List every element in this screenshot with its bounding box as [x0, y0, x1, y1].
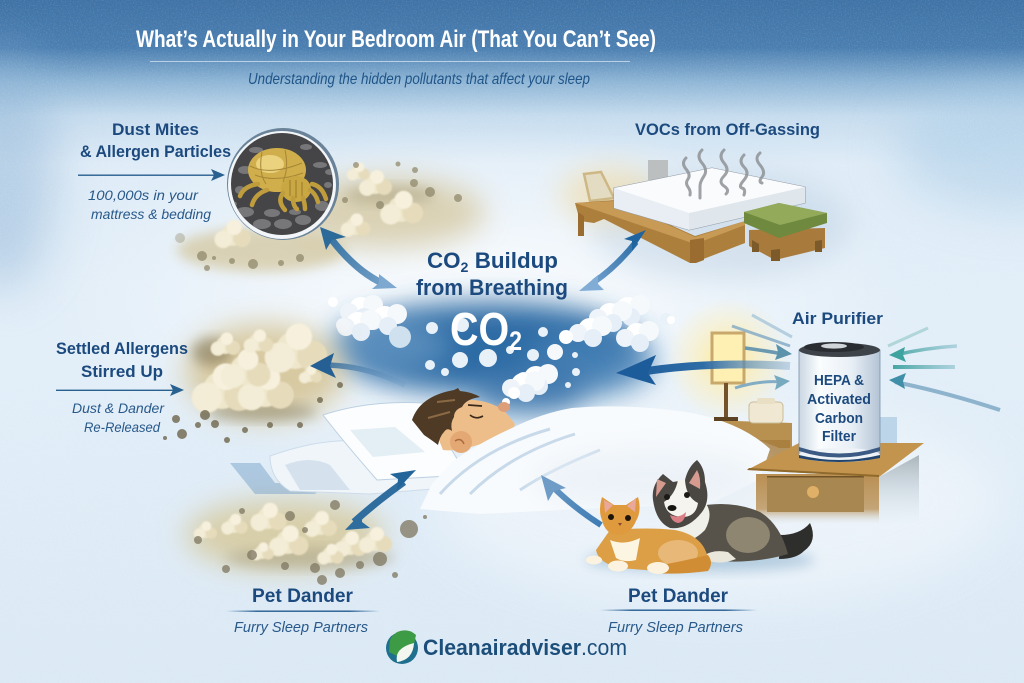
pet dander label right: Furry Sleep Partners [608, 620, 743, 636]
icon: air purifier: Activated [807, 391, 871, 408]
dust mite description: 100,000s in your [88, 187, 199, 203]
arrows: air drawn into purifier left side [732, 315, 792, 390]
blanket [420, 406, 770, 514]
logo: Cleanairadviser.com [386, 630, 627, 664]
icon: air purifier: HEPA & [814, 372, 864, 389]
dust mite heading: & Allergen Particles [80, 142, 231, 161]
hair [412, 388, 480, 445]
heading: CO2 buildup [416, 248, 568, 300]
label: big CO2: 2 [509, 326, 522, 356]
pet dander label right: Pet Dander [628, 586, 729, 607]
settled allergens heading [56, 339, 188, 381]
settled allergens heading: Stirred Up [81, 362, 163, 381]
thought bubbles from sleeper [425, 318, 580, 406]
nose [498, 402, 510, 412]
settled allergens description [72, 400, 165, 435]
arrow: pets to sleeper [541, 475, 601, 525]
heading: air purifier: Air Purifier [792, 309, 883, 328]
heading: CO2 buildup: from Breathing [416, 275, 568, 300]
clouds right [547, 295, 675, 360]
heading: CO2 buildup: CO [427, 248, 460, 273]
front pillow [323, 402, 467, 480]
settled allergens description: Re-Released [84, 419, 161, 435]
icon: front nightstand [747, 417, 924, 525]
label: big CO2: CO [450, 303, 519, 355]
arrow: CO2 to settled allergens [310, 353, 405, 385]
panel: mattress and bed [560, 160, 850, 280]
heading: VOCs: VOCs from Off-Gassing [635, 120, 820, 139]
dust cloud: bottom pet dander [185, 499, 427, 585]
settled allergens heading: Settled Allergens [56, 339, 188, 358]
icon: green ottoman [744, 203, 827, 261]
back pillow [270, 441, 470, 494]
wall frame [584, 172, 614, 201]
pet dander label left: Pet Dander [252, 586, 354, 607]
dust mite description: mattress & bedding [91, 206, 211, 222]
icon: off-gassing wavy lines [684, 150, 764, 198]
dust cloud: settled allergens [163, 323, 345, 443]
eye [470, 415, 483, 418]
icon: air purifier: Filter [822, 428, 856, 445]
settled allergens description: Dust & Dander [72, 400, 165, 416]
icon: bedside lamp and box [666, 298, 790, 423]
arrow: sleeper to bottom dust [345, 470, 416, 530]
icon: sleeping person with pillow and blanket [230, 388, 792, 514]
face [430, 400, 515, 450]
panel: CO2 cloud zone [328, 295, 675, 416]
arrow: dust mite to CO2 [320, 227, 397, 289]
arrow: purifier to CO2 [616, 355, 790, 385]
dust mite heading: Dust Mites [112, 120, 199, 139]
pet dander label left [226, 586, 380, 636]
dust cloud: around dust mite [175, 162, 485, 272]
clouds left [328, 295, 411, 348]
icon: leaf logo [386, 630, 418, 664]
back nightstand [709, 420, 792, 468]
pet dander label left: Furry Sleep Partners [234, 620, 368, 636]
icon: air purifier [799, 342, 880, 462]
arrow: settled allergens pointer [56, 384, 184, 396]
arrow: dust mite label pointer [78, 169, 225, 181]
icon: dust mite magnified circle [227, 128, 339, 240]
arrows: air drawn into purifier right side [888, 328, 1000, 410]
bed shadow [230, 463, 335, 494]
subtitle: Understanding the hidden pollutants that affect your sleep [248, 71, 590, 88]
dust mite description [88, 187, 211, 222]
pet dander label right [600, 586, 757, 636]
icon: dog [585, 460, 815, 572]
heading: CO2 buildup: 2 [461, 259, 469, 275]
logo: Cleanairadviser.com: Cleanairadviser.com [423, 635, 627, 660]
mattress [614, 168, 805, 230]
icon: air purifier: Carbon [815, 410, 863, 427]
title: What’s Actually in Your Bedroom Air (That You Can’t See) [136, 26, 656, 53]
dust mite heading [80, 120, 231, 161]
icon: cat [586, 497, 711, 574]
bed frame [575, 200, 745, 263]
heading: CO2 buildup: Buildup [468, 248, 558, 273]
arrow: VOCs to CO2 [579, 230, 646, 291]
